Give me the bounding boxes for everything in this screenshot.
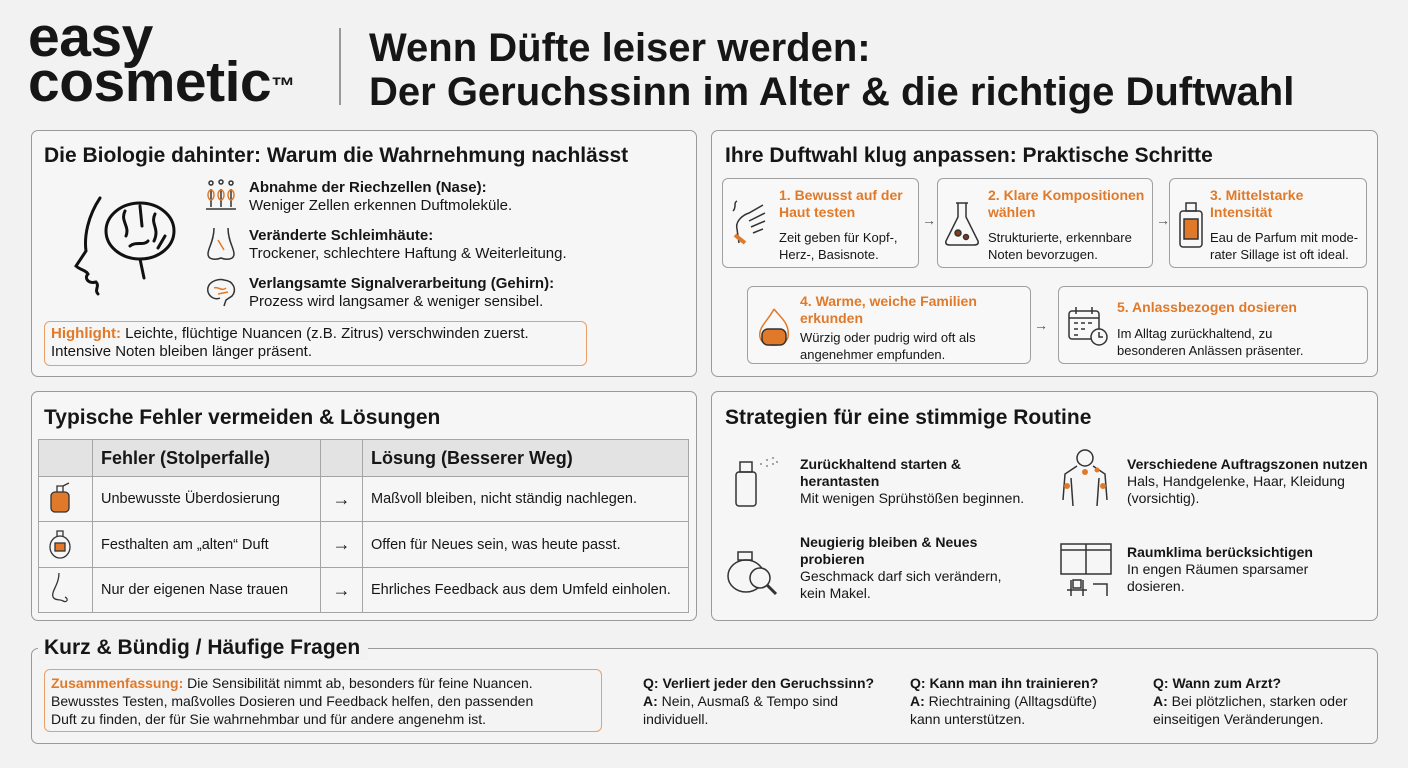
faq 1: Q: Verliert jeder den Geruchssinn?	[643, 675, 874, 691]
step 3: Eau de Parfum mit mode-	[1210, 230, 1358, 245]
faq 1: individuell.	[643, 711, 708, 727]
item: start: Mit wenigen Sprühstößen beginnen.	[800, 490, 1024, 506]
step 5: 5. Anlassbezogen dosieren	[1117, 299, 1297, 315]
panel: routine	[711, 391, 1378, 621]
table: Festhalten am „alten“ Duft	[101, 536, 269, 552]
step 4	[747, 286, 1031, 364]
callout: highlight: Intensive Noten bleiben länger präsent.	[51, 343, 312, 360]
text: schleimhaeute	[249, 227, 567, 262]
title: Der Geruchssinn im Alter & die richtige Duftwahl	[369, 70, 1294, 114]
title	[369, 26, 1294, 114]
step 2: Noten bevorzugen.	[988, 247, 1098, 262]
logo	[28, 5, 295, 114]
heading: Die Biologie dahinter: Warum die Wahrnehmung nachlässt	[44, 144, 628, 167]
table: Lösung (Besserer Weg)	[371, 448, 573, 468]
item: curious: kein Makel.	[800, 585, 871, 601]
step 2	[937, 178, 1153, 268]
item: start: Zurückhaltend starten &	[800, 456, 961, 472]
faq 3: A: Bei plötzlichen, starken oder	[1153, 693, 1348, 709]
callout: summary: Duft zu finden, der für Sie wahrnehmbar und für andere angenehm ist.	[51, 711, 486, 727]
table: Ehrliches Feedback aus dem Umfeld einholen.	[371, 582, 671, 598]
faq 1	[643, 675, 874, 727]
item: zones	[1062, 449, 1368, 506]
step 1: Zeit geben für Kopf-,	[779, 230, 898, 245]
title: Wenn Düfte leiser werden:	[369, 26, 871, 70]
icon: nose	[207, 228, 235, 260]
item: zones: Verschiedene Auftragszonen nutzen	[1127, 456, 1368, 472]
text: riechzellen	[249, 179, 512, 214]
step 1: Herz-, Basisnote.	[779, 247, 879, 262]
faq 3: Q: Wann zum Arzt?	[1153, 675, 1281, 691]
item: curious: Geschmack darf sich verändern,	[800, 568, 1002, 584]
faq 2: Q: Kann man ihn trainieren?	[910, 675, 1098, 691]
heading: Typische Fehler vermeiden & Lösungen	[44, 406, 440, 429]
step 3	[1169, 178, 1367, 268]
item: curious: Neugierig bleiben & Neues	[800, 534, 977, 550]
panel: biology	[31, 130, 697, 377]
text: signal: Prozess wird langsamer & weniger sensibel.	[249, 293, 543, 310]
logo: easy	[28, 5, 153, 69]
step 5	[1058, 286, 1368, 364]
text: schleimhaeute: Veränderte Schleimhäute:	[249, 227, 433, 244]
table: →	[332, 580, 350, 600]
faq 3	[1153, 675, 1348, 727]
faq 2: A: Riechtraining (Alltagsdüfte)	[910, 693, 1097, 709]
faq 2: kann unterstützen.	[910, 711, 1025, 727]
step 4: Würzig oder pudrig wird oft als	[800, 330, 976, 345]
arrow: →	[1156, 212, 1170, 228]
step 4: angenehmer empfunden.	[800, 347, 945, 362]
step 1	[722, 178, 919, 268]
logo: cosmetic™	[28, 50, 295, 114]
icon: cells	[206, 179, 236, 210]
text: signal	[249, 275, 554, 310]
item: room: In engen Räumen sparsamer	[1127, 561, 1308, 577]
callout: highlight: Highlight: Leichte, flüchtige Nuancen (z.B. Zitrus) verschwinden zuerst.	[51, 325, 529, 342]
text: riechzellen: Abnahme der Riechzellen (Nase):	[249, 179, 487, 196]
table: Offen für Neues sein, was heute passt.	[371, 536, 621, 552]
callout: summary	[44, 669, 602, 732]
item: start: herantasten	[800, 473, 879, 489]
step 3: 3. Mittelstarke	[1210, 187, 1303, 203]
arrow: →	[1034, 317, 1048, 333]
table: →	[332, 534, 350, 554]
table	[38, 439, 689, 613]
table: Unbewusste Überdosierung	[101, 491, 280, 507]
table: Nur der eigenen Nase trauen	[101, 582, 288, 598]
step 4: erkunden	[800, 310, 863, 326]
item: start	[735, 456, 1024, 507]
icon: head with brain	[74, 196, 176, 296]
faq 1: A: Nein, Ausmaß & Tempo sind	[643, 693, 838, 709]
heading: Kurz & Bündig / Häufige Fragen	[44, 636, 360, 659]
panel: mistakes	[31, 391, 697, 621]
step 4: 4. Warme, weiche Familien	[800, 293, 977, 309]
callout: summary: Bewusstes Testen, maßvolles Dosieren und Feedback helfen, den passenden	[51, 693, 533, 709]
callout: highlight	[44, 321, 587, 366]
item: zones: (vorsichtig).	[1127, 490, 1199, 506]
text: signal: Verlangsamte Signalverarbeitung (Gehirn):	[249, 275, 554, 292]
heading: Strategien für eine stimmige Routine	[725, 406, 1091, 429]
table: Fehler (Stolperfalle)	[101, 448, 270, 468]
icon: brain	[207, 278, 236, 306]
step 5: besonderen Anlässen präsenter.	[1117, 343, 1303, 358]
text: riechzellen: Weniger Zellen erkennen Duftmoleküle.	[249, 197, 512, 214]
callout: summary: Zusammenfassung: Die Sensibilität nimmt ab, besonders für feine Nuancen.	[51, 675, 533, 691]
item: zones: Hals, Handgelenke, Haar, Kleidung	[1127, 473, 1345, 489]
step 5: Im Alltag zurückhaltend, zu	[1117, 326, 1272, 341]
item: curious	[727, 534, 1002, 601]
arrow: →	[922, 212, 936, 228]
table: →	[332, 488, 350, 508]
item: curious: probieren	[800, 551, 865, 567]
step 2: Strukturierte, erkennbare	[988, 230, 1132, 245]
step 3: rater Sillage ist oft ideal.	[1210, 247, 1349, 262]
step 2: 2. Klare Kompositionen	[988, 187, 1144, 203]
step 1: 1. Bewusst auf der	[779, 187, 903, 203]
panel: steps	[711, 130, 1378, 377]
heading: Ihre Duftwahl klug anpassen: Praktische Schritte	[725, 144, 1213, 167]
table: Maßvoll bleiben, nicht ständig nachlegen.	[371, 491, 637, 507]
item: room	[1060, 543, 1313, 596]
step 1: Haut testen	[779, 204, 855, 220]
panel: summary & faq	[31, 648, 1378, 744]
faq 3: einseitigen Veränderungen.	[1153, 711, 1323, 727]
item: room: dosieren.	[1127, 578, 1185, 594]
item: room: Raumklima berücksichtigen	[1127, 544, 1313, 560]
faq 2	[910, 675, 1098, 727]
step 3: Intensität	[1210, 204, 1272, 220]
text: schleimhaeute: Trockener, schlechtere Haftung & Weiterleitung.	[249, 245, 567, 262]
step 2: wählen	[988, 204, 1035, 220]
